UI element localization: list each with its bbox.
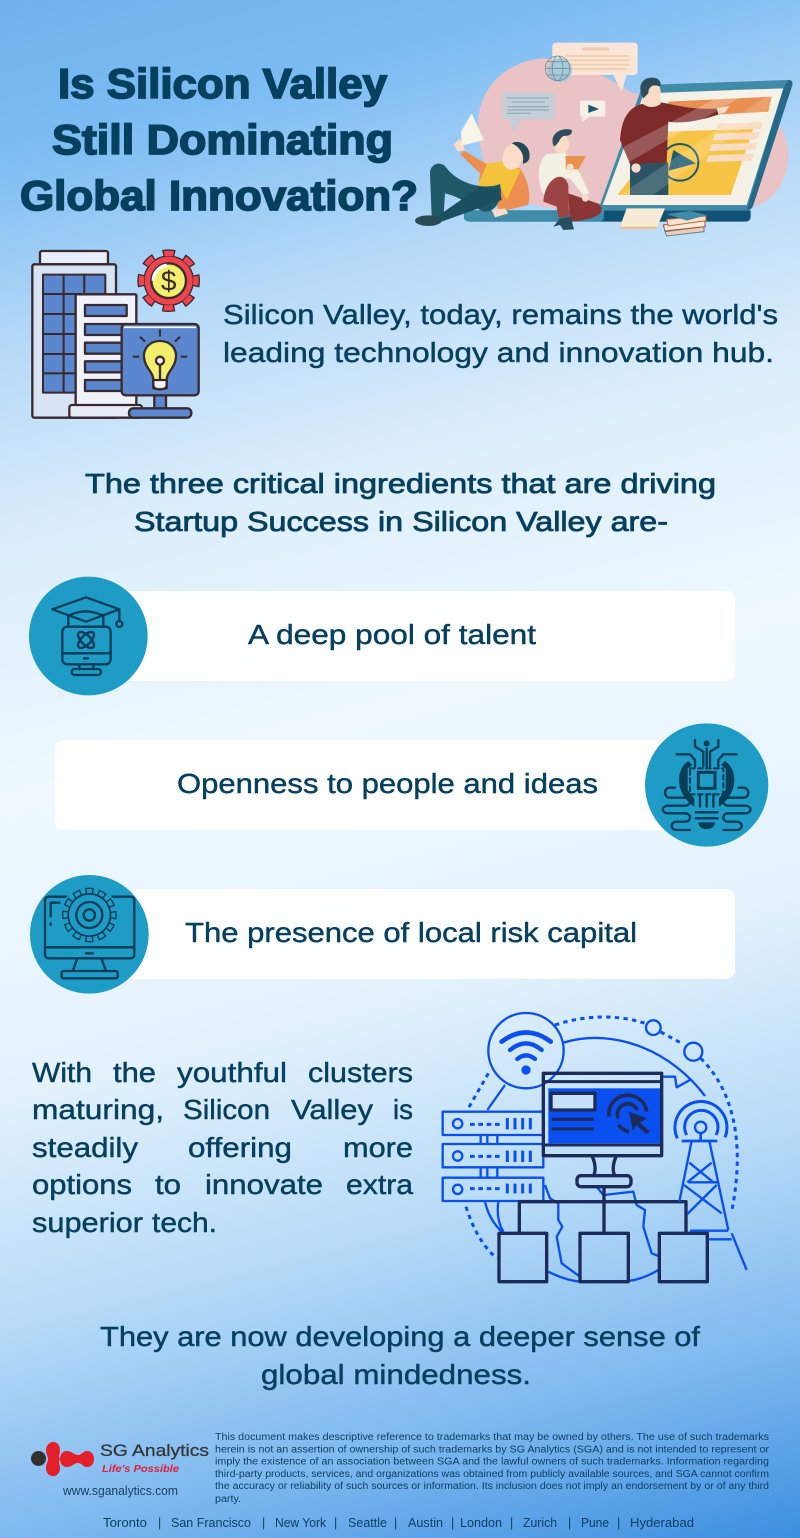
office locations: | — [510, 1516, 513, 1530]
icon: circuit lightbulb — [645, 723, 768, 847]
intro text: leading technology and innovation hub. — [223, 337, 774, 368]
logo: SG Analytics — [31, 1441, 209, 1498]
office locations: San Francisco — [171, 1516, 251, 1530]
disclaimer text: party. — [215, 1494, 241, 1505]
text block: youthful clusters: clusters — [308, 1057, 413, 1088]
heading: three critical ingredients: The three critical ingredients that are driving — [85, 468, 716, 499]
monitor — [499, 1073, 707, 1282]
radio tower — [675, 1101, 732, 1239]
icon: network globe with monitor, servers and tower — [443, 1013, 747, 1282]
text block: youthful clusters: the — [113, 1057, 156, 1088]
title: Global Innovation? — [20, 172, 418, 219]
office locations: | — [617, 1516, 620, 1530]
office locations: Pune — [581, 1516, 609, 1530]
text block: youthful clusters: more — [343, 1132, 413, 1163]
logo: SG Analytics: SG Analytics — [100, 1441, 209, 1460]
text block: youthful clusters: Silicon — [183, 1094, 270, 1125]
office locations: | — [568, 1516, 571, 1530]
text block: youthful clusters: maturing, — [32, 1094, 164, 1125]
title: Still Dominating — [52, 116, 393, 163]
intro text — [223, 299, 778, 368]
closing statement: global mindedness. — [261, 1359, 531, 1390]
text block: youthful clusters: steadily — [32, 1132, 138, 1163]
office locations: Seattle — [348, 1516, 387, 1530]
office locations: New York — [275, 1516, 327, 1530]
office locations: | — [158, 1516, 161, 1530]
office locations: Zurich — [523, 1516, 557, 1530]
panel: openness to people and ideas: Openness to people and ideas — [177, 768, 598, 799]
office locations: | — [394, 1516, 397, 1530]
disclaimer text: the accuracy or reliability of such sources or information. Its inclusion does not imply an endorsement by or of any third — [215, 1481, 769, 1492]
text block: youthful clusters: Valley — [291, 1094, 373, 1125]
heading: three critical ingredients: Startup Success in Silicon Valley are- — [134, 506, 668, 537]
closing statement — [100, 1321, 700, 1390]
panel: openness to people and ideas — [55, 723, 768, 847]
panel: presence of local risk capital — [30, 875, 735, 994]
text block: youthful clusters: extra — [346, 1169, 413, 1200]
office locations — [103, 1516, 694, 1530]
heading: three critical ingredients — [85, 468, 716, 537]
panel: deep pool of talent: A deep pool of talent — [248, 619, 536, 650]
text block: youthful clusters — [32, 1057, 413, 1238]
disclaimer text: imply the existence of an association between SGA and the lawful owners of such trademarks. Information regarding — [215, 1456, 769, 1468]
logo: SG Analytics: www.sganalytics.com — [62, 1484, 178, 1498]
presenter — [620, 78, 729, 195]
disclaimer text: herein is not an assertion of ownership of such trademarks by SG Analytics (SGA) and is not intended to represent or — [215, 1444, 770, 1456]
title — [20, 60, 418, 219]
text block: youthful clusters: offering — [188, 1132, 292, 1163]
panel: presence of local risk capital: The presence of local risk capital — [185, 917, 637, 948]
office locations: | — [262, 1516, 265, 1530]
office locations: London — [460, 1516, 502, 1530]
icon: gear on desktop monitor — [30, 875, 149, 994]
disclaimer text: This document makes descriptive reference to trademarks that may be owned by others. The use of such trademarks — [215, 1432, 769, 1443]
logo: SG Analytics: Life's Possible — [102, 1463, 179, 1475]
books — [619, 208, 707, 236]
server rack — [443, 1112, 543, 1201]
disclaimer text: third-party products, services, and organizations was obtained from publicly available sources, and SGA cannot confirm — [215, 1469, 769, 1480]
icon: office buildings, gear and lightbulb monitor — [32, 251, 199, 418]
text block: youthful clusters: youthful — [177, 1057, 287, 1088]
text block: youthful clusters: to — [155, 1169, 181, 1200]
text block: youthful clusters: innovate — [205, 1169, 323, 1200]
text block: youthful clusters: superior — [32, 1207, 143, 1238]
title: Is Silicon Valley — [58, 60, 388, 107]
text block: youthful clusters: With — [32, 1057, 92, 1088]
monitor — [464, 210, 751, 222]
text block: youthful clusters: tech. — [152, 1207, 217, 1238]
text block: youthful clusters: is — [393, 1094, 413, 1125]
reclining man — [415, 113, 530, 226]
office locations: Toronto — [103, 1516, 147, 1530]
illustration: people in front of a presentation screen — [415, 43, 792, 236]
panel: deep pool of talent — [29, 577, 735, 695]
office locations: Hyderabad — [630, 1516, 694, 1530]
icon: graduation cap on monitor — [29, 577, 148, 695]
office locations: | — [451, 1516, 454, 1530]
text block: youthful clusters: options — [32, 1169, 132, 1200]
disclaimer text — [215, 1432, 770, 1505]
sitting man — [539, 129, 602, 230]
office locations: Austin — [408, 1516, 443, 1530]
dollar sign: $ — [161, 266, 177, 297]
office locations: | — [334, 1516, 337, 1530]
closing statement: They are now developing a deeper sense of — [100, 1321, 700, 1352]
intro text: Silicon Valley, today, remains the world's — [223, 299, 778, 330]
